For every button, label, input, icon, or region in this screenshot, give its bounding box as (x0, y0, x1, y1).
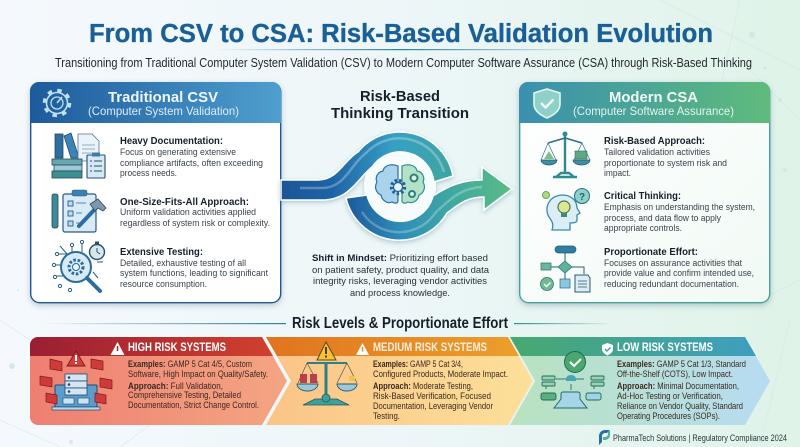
text: Shift in Mindset: and process knowledge. (350, 288, 450, 299)
text: medium risk: Approach: Moderate Testing, (373, 381, 473, 391)
panel: Modern CSA (519, 82, 770, 303)
icon: flowchart (540, 246, 590, 292)
heading: low risk: LOW RISK SYSTEMS (617, 342, 713, 354)
text: Proportionate Effort: Focuses on assurance activities that (604, 258, 742, 269)
panel: Traditional CSV (30, 82, 281, 303)
text: low risk: Ad-Hoc Testing or Verification, (617, 391, 723, 401)
text: Shift in Mindset (312, 253, 490, 299)
icon: gear target (44, 90, 70, 116)
text: One-Size-Fits-All Approach: One-Size-Fits-All Approach: (120, 196, 249, 208)
text: Proportionate Effort: Proportionate Effort: (604, 246, 698, 258)
text: Proportionate Effort (604, 246, 754, 290)
text: Risk-Based Approach (604, 135, 727, 179)
text: low risk: Examples: GAMP 5 Cat 1/3, Standard (617, 359, 746, 369)
text: high risk: Examples: GAMP 5 Cat 4/5, Custom (128, 359, 252, 369)
icon: documents and binders (52, 133, 105, 178)
text: Heavy Documentation: process needs. (120, 168, 177, 179)
text: One-Size-Fits-All Approach: regardless of system risk or complexity. (120, 218, 270, 229)
text: Critical Thinking: process, and data flow to apply (604, 213, 721, 224)
text: high risk: Software, High Impact on Quality/Safety. (128, 369, 268, 379)
footer (599, 430, 787, 445)
text: Extensive Testing: Extensive Testing: (120, 246, 203, 258)
icon: warning triangle small (356, 343, 369, 355)
icon: warning triangle small (110, 342, 124, 355)
text: Proportionate Effort: reducing redundant documentation. (604, 279, 739, 290)
text: Shift in Mindset: Shift in Mindset: Prioritizing effort based (312, 253, 488, 264)
text: Extensive Testing: Detailed, exhaustive testing of all (120, 258, 246, 269)
panel: low risk (510, 337, 770, 425)
text: high risk: Comprehensive Testing, Detailed (128, 390, 241, 400)
text: Heavy Documentation: Focus on generating extensive (120, 147, 236, 158)
text: medium risk (373, 359, 508, 421)
icon: network with check (541, 352, 604, 408)
icon: balance scale (541, 132, 590, 177)
heading: Modern CSA: Modern CSA (609, 89, 698, 106)
text: Extensive Testing (120, 246, 268, 290)
text: Risk-Based Approach: impact. (604, 168, 631, 179)
icon: server with red flags (40, 351, 112, 410)
text: Risk-Based Approach: Risk-Based Approach: (604, 135, 705, 147)
icon: clipboard, pen and hammer (52, 190, 106, 232)
subheading: (Computer System Validation) (88, 104, 239, 118)
heading: Risk-Based Thinking Transition: Risk-Based (360, 89, 440, 105)
panel: medium risk (266, 337, 533, 425)
divider line right (514, 323, 614, 324)
text: medium risk: Configured Products, Moderate Impact. (373, 369, 508, 379)
text: low risk: Off-the-Shelf (COTS), Low Impact. (617, 369, 733, 379)
heading: high risk: HIGH RISK SYSTEMS (128, 342, 226, 354)
text: low risk: Approach: Minimal Documentation, (617, 381, 739, 391)
text: One-Size-Fits-All Approach: Uniform validation activities applied (120, 207, 256, 218)
icon: shield check small (602, 343, 613, 356)
text: Extensive Testing: resource consumption. (120, 279, 207, 290)
panel: high risk (30, 337, 287, 425)
text: Extensive Testing: system functions, leading to significant (120, 268, 268, 279)
text: Critical Thinking: Emphasis on understanding the system, (604, 202, 755, 213)
icon: PharmaTech logo (599, 430, 610, 445)
text: low risk: Reliance on Vendor Quality, Standard (617, 401, 743, 411)
text: Shift in Mindset: on patient safety, product quality, and data (312, 265, 490, 276)
heading: Traditional CSV: Traditional CSV (108, 89, 218, 106)
text: One-Size-Fits-All Approach (120, 196, 270, 229)
text: Risk-Based Approach: Tailored validation activities (604, 147, 710, 158)
title: From CSV to CSA: Risk-Based Validation Evolution (89, 20, 713, 48)
icon: head with light bulb (542, 188, 590, 230)
text: Critical Thinking: appropriate controls. (604, 223, 682, 234)
icon: shield check (534, 89, 560, 118)
heading: Risk Levels: Risk Levels & Proportionate Effort (292, 315, 509, 332)
arrow: transition swoosh (281, 132, 512, 240)
text: medium risk: Documentation, Leveraging Vendor (373, 401, 493, 411)
icon: magnifier, gear and stopwatch (52, 240, 104, 292)
text: low risk (617, 359, 746, 421)
text: high risk: Documentation, Strict Change Control. (128, 400, 259, 410)
text: Risk-Based Approach: proportionate to system risk and (604, 158, 727, 169)
text: high risk (128, 359, 268, 410)
text: high risk: Approach: Full Validation, (128, 381, 223, 391)
icon: scale with warning (297, 342, 357, 405)
title underline (215, 49, 590, 50)
text: medium risk: Risk-Based Verification, Focused (373, 391, 491, 401)
text: Heavy Documentation: compliance artifacts, often exceeding (120, 158, 263, 169)
icon: brain with gears (376, 165, 424, 203)
text: Heavy Documentation (120, 135, 263, 179)
text: Heavy Documentation: Heavy Documentation: (120, 135, 223, 147)
text: medium risk: Testing. (373, 411, 400, 421)
subheading: (Computer Software Assurance) (573, 104, 734, 118)
text: Shift in Mindset: integrity risks, leveraging vendor activities (313, 276, 487, 287)
text: medium risk: Examples: GAMP 5 Cat 3/4, (373, 359, 463, 369)
heading: Risk-Based Thinking Transition (331, 89, 469, 122)
text: Proportionate Effort: provide value and confirm intended use, (604, 268, 754, 279)
text: Critical Thinking: Critical Thinking: (604, 190, 681, 202)
heading: Risk-Based Thinking Transition: Thinking Transition (331, 106, 469, 122)
heading: medium risk: MEDIUM RISK SYSTEMS (373, 342, 487, 354)
text: Critical Thinking (604, 190, 755, 234)
divider line left (40, 323, 286, 324)
text: low risk: Operating Procedures (SOPs). (617, 411, 720, 421)
icon: head with light bulb: ? (579, 192, 585, 203)
